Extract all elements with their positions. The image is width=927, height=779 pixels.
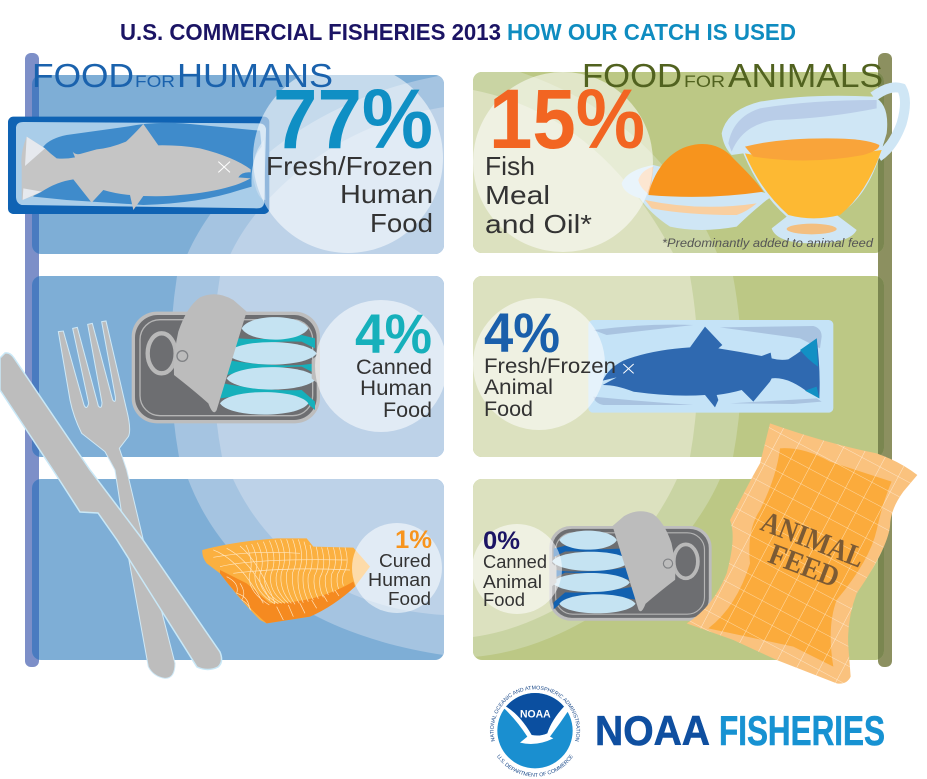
circle: canned animal food background [472,524,562,614]
icon: fork [58,321,175,678]
icon: frozen blue fish in ice block [588,320,833,413]
circle: 77% background [253,63,443,253]
circle: fresh/frozen animal food background [473,298,605,430]
left side bar [25,53,39,667]
stat: 15% fish meal and oil: and Oil* [485,209,592,239]
panel: fresh/frozen animal food [473,276,884,457]
stat: 77% fresh/frozen human food [266,72,433,238]
heading: food for humans [32,57,333,94]
stat: 4% fresh/frozen animal food: Food [484,398,533,421]
circle: cured human food background [352,523,442,613]
icon: animal feed sack [687,423,917,684]
icon: salmon fillet [202,538,370,623]
icon: bowl of fish meal [622,144,770,230]
icon: open sardine can, human food [132,294,320,423]
stat: 1% cured human food: Human [368,570,431,590]
stat: 4% fresh/frozen animal food: 4% [484,301,560,364]
heading: food for humans: FOR [135,72,175,91]
stat: 0% canned animal food: Animal [483,572,542,592]
stat: 4% fresh/frozen animal food: Fresh/Frozen [484,355,616,378]
stat: 0% canned animal food: 0% [483,527,520,555]
stat: 0% canned animal food [483,527,547,610]
title: U.S. COMMERCIAL FISHERIES 2013 [120,19,501,45]
title [120,19,796,45]
panel: cured human food [32,479,444,660]
heading: food for animals [582,57,883,94]
logo: NOAA seal: NATIONAL OCEANIC AND ATMOSPHERIC ADMINISTRATION [490,686,580,742]
icon: gravy boat of fish oil [722,87,905,243]
title: HOW OUR CATCH IS USED [507,19,796,45]
stat: 1% cured human food: Food [388,589,431,609]
stat: 4% fresh/frozen animal food: Animal [484,376,553,399]
stat: 15% fish meal and oil: Meal [485,180,550,210]
footnote: *Predominantly added to animal feed [662,236,873,250]
panel: canned human food [32,276,444,457]
stat: 15% fish meal and oil: 15% [489,72,645,166]
logo: NOAA seal: NOAA [520,708,551,720]
circle: canned human food background [315,300,447,432]
stat: 0% canned animal food: Canned [483,552,547,572]
stat: 77% fresh/frozen human food: Human [340,179,433,209]
panel: canned animal food [473,479,884,660]
icon: frozen salmon in ice block [8,117,269,214]
stat: 1% cured human food: 1% [395,526,432,554]
stat: 4% canned human food: Human [360,377,432,400]
logo: NOAA Fisheries wordmark: NOAA [595,707,710,754]
stat: 4% canned human food: 4% [355,302,432,365]
right side bar [878,53,892,667]
stat: 0% canned animal food: Food [483,590,525,610]
label: animal feed: ANIMAL [756,505,869,574]
stat: 4% fresh/frozen animal food [484,301,616,421]
stat: 15% fish meal and oil [485,72,645,239]
stat: 77% fresh/frozen human food: 77% [273,72,433,166]
stat: 1% cured human food [368,526,432,609]
stat: 77% fresh/frozen human food: Fresh/Frozen [266,151,433,181]
icon: open sardine can, animal food [549,511,712,621]
stat: 77% fresh/frozen human food: Food [370,208,433,238]
circle: fish meal background [473,72,653,252]
stat: 15% fish meal and oil: Fish [485,151,535,181]
label: animal feed: FEED [764,537,844,594]
stat: 4% canned human food [355,302,432,422]
panel: fresh/frozen human food [32,75,444,255]
heading: food for animals: ANIMALS [728,57,883,94]
stat: 4% canned human food: Food [383,399,432,422]
logo: NOAA seal: U.S. DEPARTMENT OF COMMERCE [498,754,573,777]
icon: knife [0,353,222,670]
stat: 4% canned human food: Canned [356,356,432,379]
heading: food for animals: FOR [684,72,725,91]
logo: NOAA Fisheries wordmark [595,707,885,754]
panel: fish meal and oil [473,72,884,253]
stat: 1% cured human food: Cured [379,551,431,571]
heading: food for humans: FOOD [32,57,134,94]
heading: food for animals: FOOD [582,57,682,94]
logo: NOAA seal [490,686,580,777]
heading: food for humans: HUMANS [177,57,333,94]
